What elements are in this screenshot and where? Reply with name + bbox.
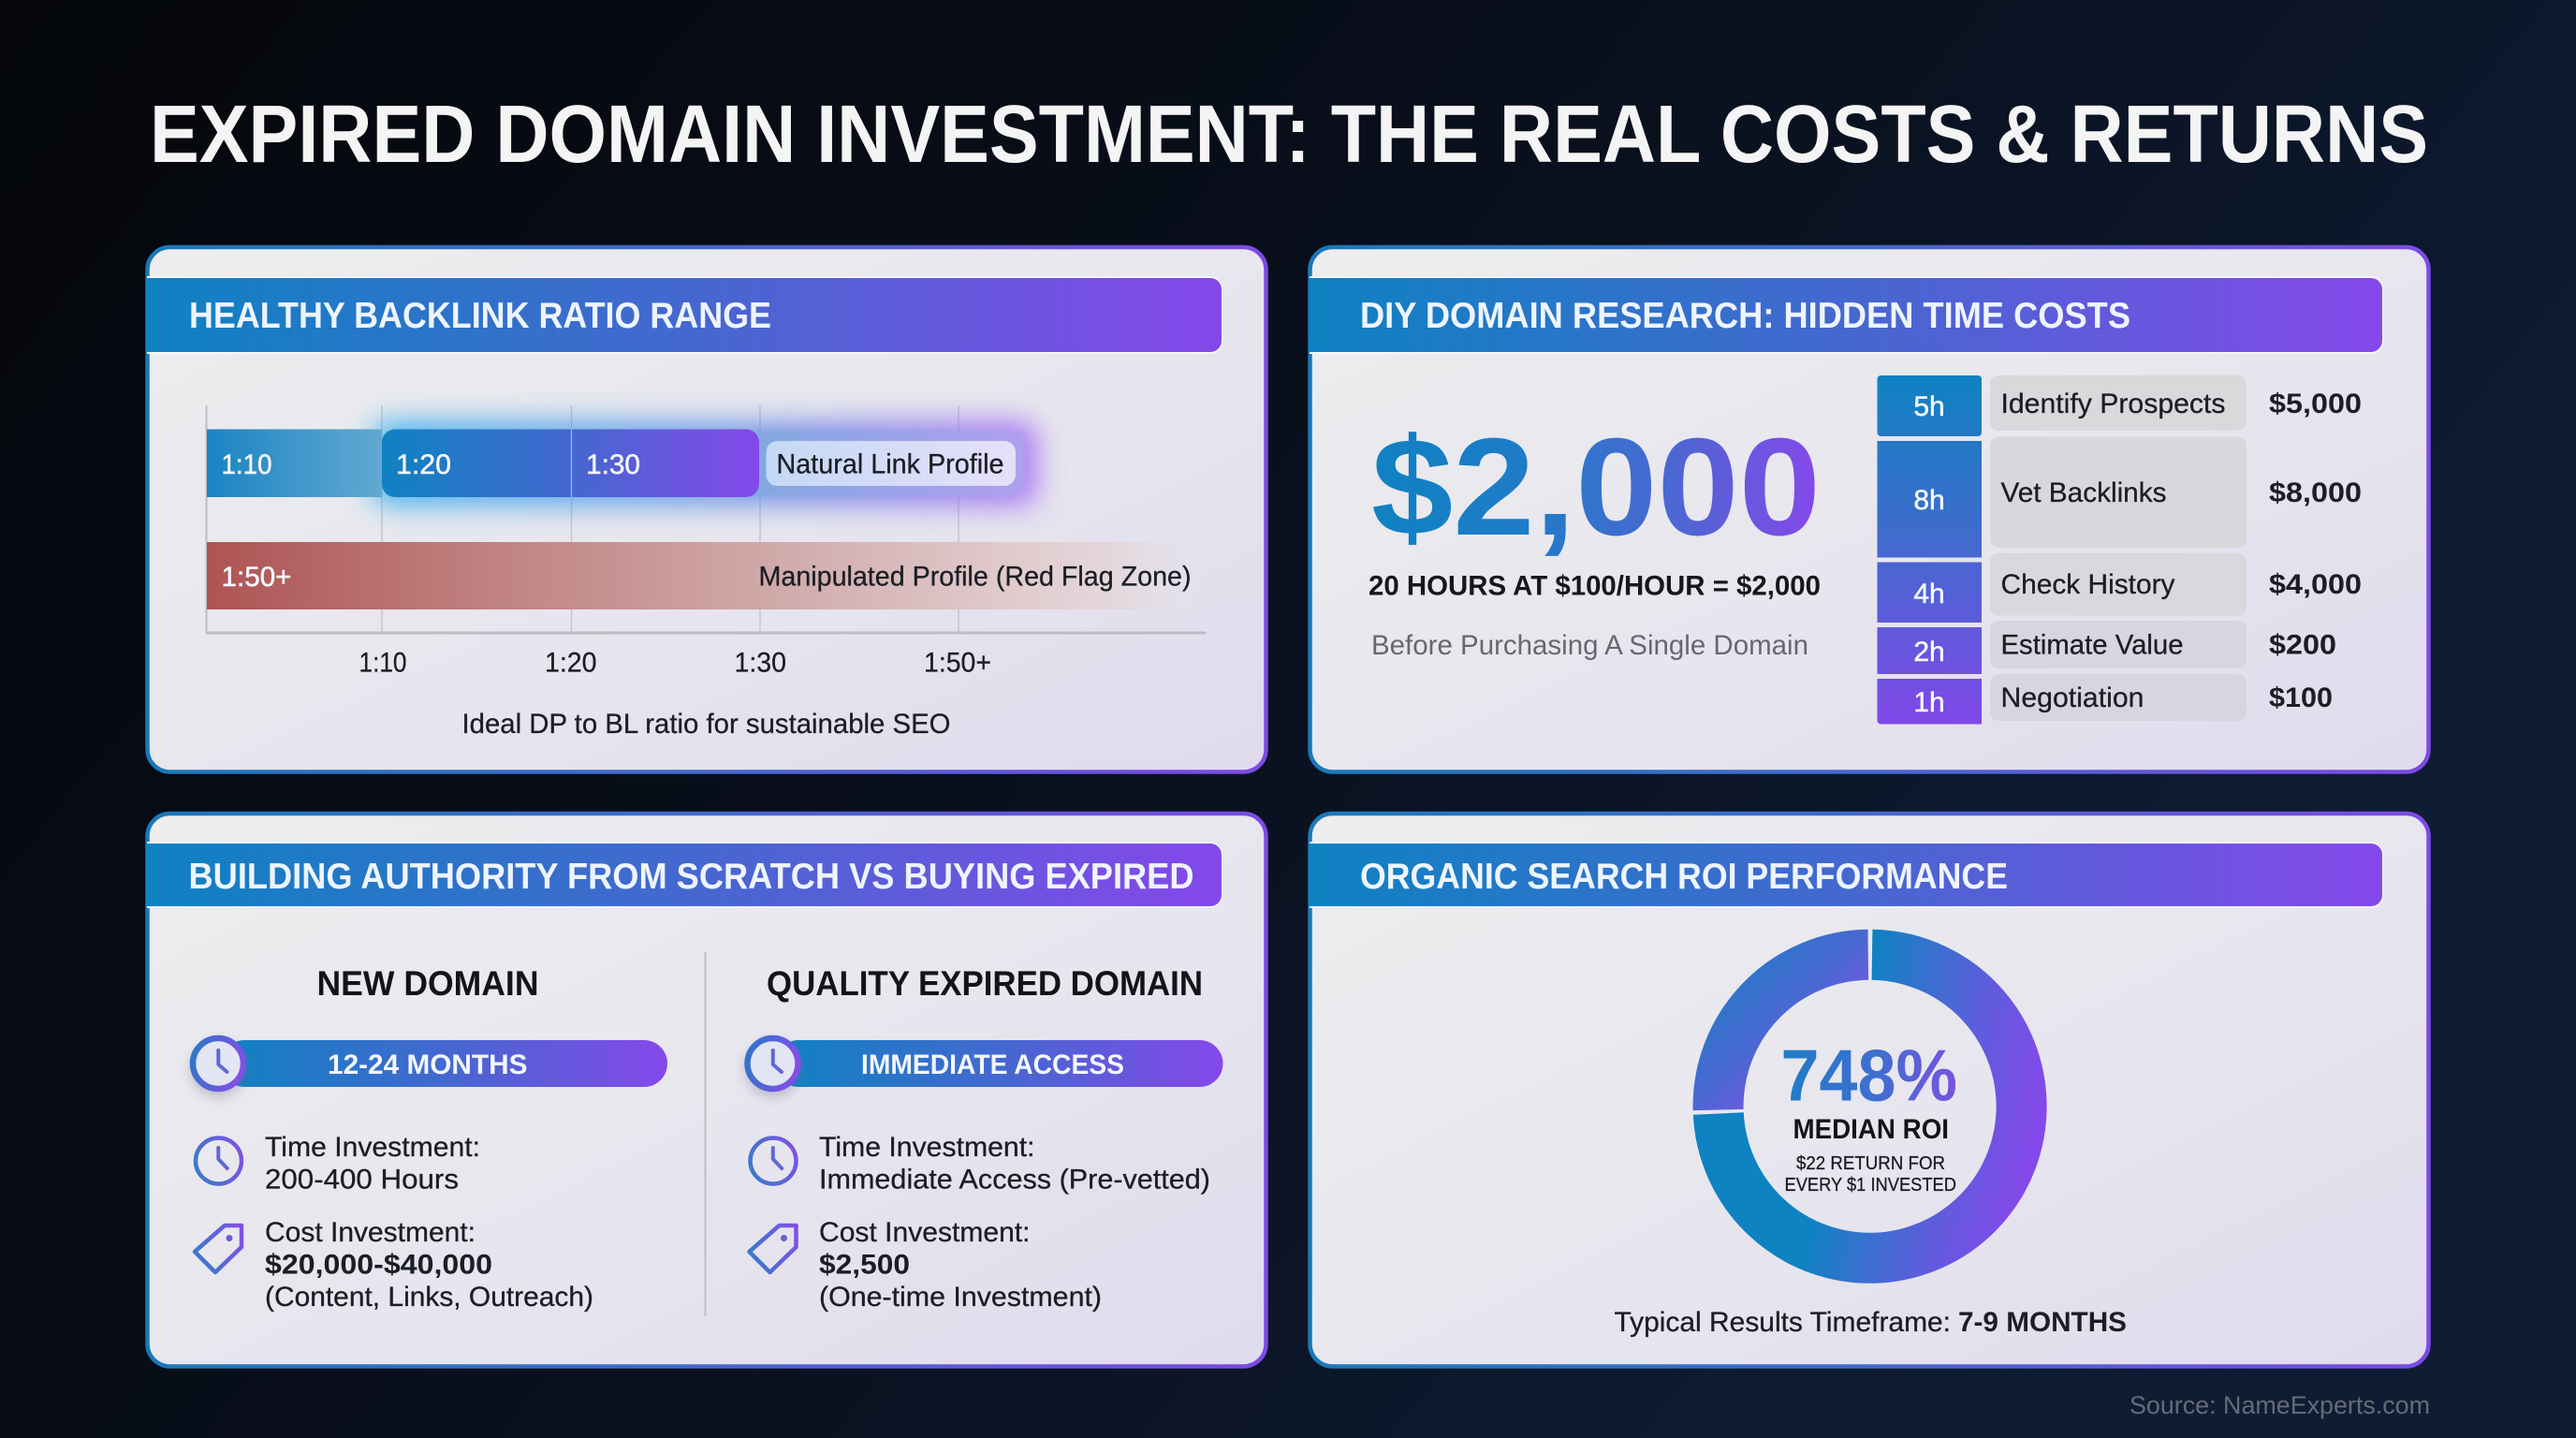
natural link profile label xyxy=(766,441,1016,486)
row: negotiation: Negotiation xyxy=(2001,682,2144,713)
cost investment: $2,500 xyxy=(819,1249,910,1281)
big number: $2,000 xyxy=(1371,410,1821,565)
cost investment: (One-time Investment) xyxy=(819,1282,1102,1313)
axis labels: 1:30 xyxy=(734,648,786,678)
chart caption: Ideal DP to BL ratio for sustainable SEO xyxy=(462,709,951,740)
cost investment: (Content, Links, Outreach) xyxy=(265,1282,593,1313)
cost investment: $20,000-$40,000 xyxy=(265,1249,492,1281)
results timeframe xyxy=(1614,1307,2127,1338)
axis labels: 1:20 xyxy=(545,648,597,678)
donut centre label: MEDIAN ROI xyxy=(1793,1114,1949,1145)
column heading: NEW DOMAIN xyxy=(316,964,539,1003)
row: identify prospects: Identify Prospects xyxy=(2001,389,2226,419)
column: quality expired domain xyxy=(745,964,1222,1313)
panel header xyxy=(146,276,1222,354)
icon: price tag xyxy=(749,1225,796,1272)
panel: hidden time costs xyxy=(1309,247,2428,771)
row: identify prospects: $5,000 xyxy=(2269,389,2362,419)
row: estimate value: Estimate Value xyxy=(2001,629,2183,661)
panel header xyxy=(1309,276,2383,354)
red flag zone bar xyxy=(207,542,1195,609)
row: check history: 4h xyxy=(1913,579,1945,609)
row: estimate value xyxy=(1878,621,2336,674)
cost investment: Cost Investment: xyxy=(265,1217,476,1248)
donut chart xyxy=(1719,955,2022,1258)
natural zone bar: 1:30 xyxy=(586,449,640,480)
results timeframe: 7-9 MONTHS xyxy=(1958,1307,2127,1338)
cost investment xyxy=(195,1217,593,1313)
axis labels: 1:50+ xyxy=(924,648,991,678)
row: identify prospects: 5h xyxy=(1913,391,1945,422)
natural zone bar: 1:10 xyxy=(221,449,271,480)
axis labels xyxy=(359,648,991,678)
subtext: Before Purchasing A Single Domain xyxy=(1371,630,1808,661)
row: check history xyxy=(1878,553,2362,623)
natural zone bar xyxy=(207,429,1026,497)
time investment xyxy=(196,1132,480,1195)
donut centre note xyxy=(1784,1153,1956,1196)
time investment: 200-400 Hours xyxy=(265,1165,459,1195)
red flag zone bar: 1:50+ xyxy=(221,562,292,593)
row: vet backlinks xyxy=(1878,436,2362,558)
column: new domain xyxy=(190,964,667,1313)
row: check history: $4,000 xyxy=(2269,569,2362,600)
results timeframe: Typical Results Timeframe: xyxy=(1614,1307,1951,1338)
panel header: DIY DOMAIN RESEARCH: HIDDEN TIME COSTS xyxy=(1360,296,2130,336)
icon: clock xyxy=(751,1138,796,1183)
donut centre note: EVERY $1 INVESTED xyxy=(1784,1175,1956,1196)
icon: clock xyxy=(196,1138,242,1183)
icon: price tag xyxy=(195,1225,242,1272)
row: estimate value: 2h xyxy=(1913,637,1945,668)
panel: building authority vs buying expired xyxy=(146,814,1266,1367)
panel header: ORGANIC SEARCH ROI PERFORMANCE xyxy=(1360,857,2008,897)
red flag zone bar: Manipulated Profile (Red Flag Zone) xyxy=(758,562,1191,592)
time investment: Time Investment: xyxy=(819,1132,1035,1163)
row: estimate value: $200 xyxy=(2269,629,2336,661)
panel header: BUILDING AUTHORITY FROM SCRATCH VS BUYING EXPIRED xyxy=(189,857,1194,897)
donut centre note: $22 RETURN FOR xyxy=(1796,1153,1945,1174)
time cost table xyxy=(1877,375,2362,725)
row: vet backlinks: 8h xyxy=(1913,485,1945,516)
calculation text: 20 HOURS AT $100/HOUR = $2,000 xyxy=(1368,571,1821,601)
time investment: Time Investment: xyxy=(265,1132,480,1163)
source note: Source: NameExperts.com xyxy=(2130,1391,2430,1419)
panel header xyxy=(1309,842,2383,908)
donut centre value: 748% xyxy=(1780,1034,1957,1116)
row: identify prospects xyxy=(1878,375,2362,436)
timeline pill: 12-24 months: 12-24 MONTHS xyxy=(328,1049,528,1080)
column heading: QUALITY EXPIRED DOMAIN xyxy=(767,964,1203,1003)
row: check history: Check History xyxy=(2001,569,2175,600)
ratio chart xyxy=(206,405,1206,678)
axis labels: 1:10 xyxy=(359,648,406,678)
row: negotiation xyxy=(1877,674,2333,725)
time investment: Immediate Access (Pre-vetted) xyxy=(819,1165,1210,1195)
panel header: HEALTHY BACKLINK RATIO RANGE xyxy=(189,296,771,336)
natural zone bar: 1:20 xyxy=(396,449,451,480)
cost investment: Cost Investment: xyxy=(819,1217,1030,1248)
natural link profile label: Natural Link Profile xyxy=(777,449,1003,479)
time investment xyxy=(751,1132,1210,1195)
row: vet backlinks: Vet Backlinks xyxy=(2001,477,2166,508)
cost investment xyxy=(749,1217,1102,1313)
panel header xyxy=(146,842,1222,908)
timeline pill: immediate access: IMMEDIATE ACCESS xyxy=(861,1049,1124,1080)
row: vet backlinks: $8,000 xyxy=(2269,477,2362,508)
timeline pill: immediate access xyxy=(745,1038,1222,1097)
panel: healthy backlink ratio range xyxy=(146,247,1266,771)
panel: organic search ROI xyxy=(1309,814,2428,1367)
row: negotiation: $100 xyxy=(2269,682,2333,713)
row: negotiation: 1h xyxy=(1913,687,1945,718)
timeline pill: 12-24 months xyxy=(190,1038,667,1097)
